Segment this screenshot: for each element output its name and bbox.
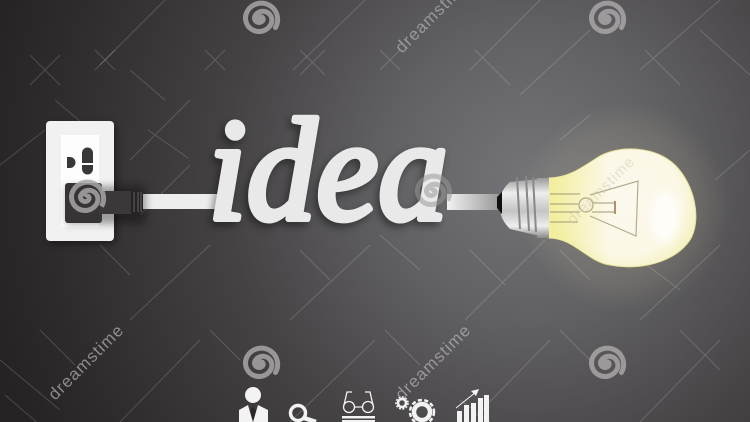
spiral: bottom left: [241, 342, 284, 384]
watermark text: bottom left: dreamstime: [44, 321, 128, 404]
watermark: spirals: [241, 0, 630, 384]
icon: gears: [396, 397, 434, 422]
spiral: top left: [241, 0, 284, 39]
icon: glasses and books: [342, 392, 375, 422]
neck tint: [549, 152, 610, 265]
bulb glow: [520, 102, 730, 312]
word: idea: idea: [208, 89, 448, 251]
icon: bar chart: [456, 389, 489, 422]
word: idea: idea: [205, 93, 445, 255]
watermark: text over bulb: dreamstime: [564, 153, 638, 228]
icon: person: [239, 387, 268, 422]
screw base: [501, 178, 548, 238]
socket holes: [67, 148, 93, 174]
plug: [65, 176, 146, 224]
icon row: [239, 387, 489, 422]
filament: [550, 181, 638, 236]
light bulb: [497, 102, 730, 312]
watermark: spiral over word: [413, 170, 456, 212]
right wire: [447, 194, 499, 210]
icon: magnifier: [290, 406, 316, 422]
glass: [549, 149, 696, 267]
plug spiral: [67, 176, 110, 218]
spiral: bottom right: [587, 342, 630, 384]
power cord: [140, 194, 220, 209]
spiral: top right: [587, 0, 630, 39]
highlight: [651, 192, 679, 244]
watermark: dreamstime labels: [44, 0, 475, 404]
wall socket: [46, 121, 116, 244]
watermark text: bottom centre: dreamstime: [391, 321, 475, 404]
